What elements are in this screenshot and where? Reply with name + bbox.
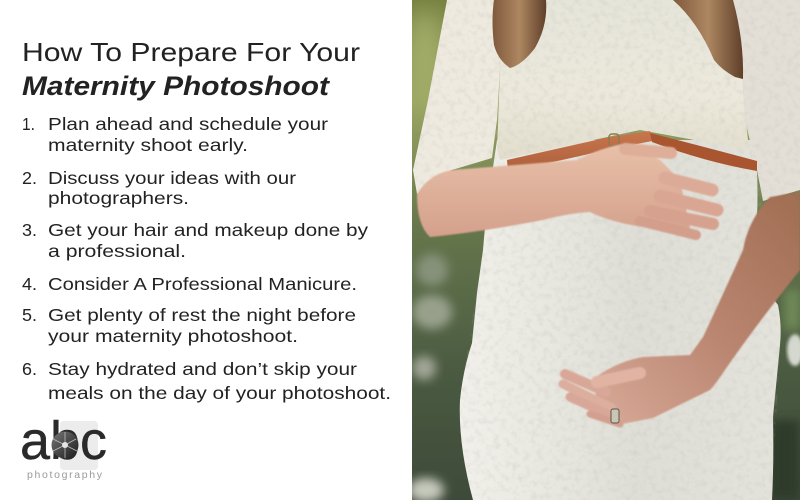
item 5: your maternity photoshoot. bbox=[48, 326, 298, 346]
item 6: Stay hydrated and don’t skip your bbox=[48, 359, 357, 379]
photo: pregnant woman in lace dress bbox=[407, 0, 800, 500]
logo: abc photography: abc bbox=[20, 411, 107, 471]
hair right bbox=[673, 0, 743, 79]
item 1: Plan ahead and schedule your bbox=[48, 114, 328, 134]
item 1: maternity shoot early. bbox=[48, 135, 248, 155]
checklist bbox=[22, 114, 391, 403]
item 5: Get plenty of rest the night before bbox=[48, 305, 356, 325]
fingers lower hand bbox=[563, 373, 640, 424]
fingers upper hand bbox=[625, 149, 717, 235]
item 3 bbox=[22, 220, 368, 261]
item 6: 6. bbox=[22, 359, 37, 379]
dress bodice bbox=[493, 0, 749, 160]
item 1 bbox=[22, 114, 328, 155]
item 5: 5. bbox=[22, 305, 37, 325]
upper arm and hand bbox=[417, 143, 717, 237]
item 2 bbox=[22, 168, 296, 208]
item 1: 1. bbox=[22, 114, 35, 134]
item 6 bbox=[22, 359, 391, 403]
left sleeve bbox=[413, 0, 500, 194]
photo background foliage bbox=[407, 0, 800, 500]
panel: text background bbox=[0, 0, 412, 500]
title: Maternity Photoshoot bbox=[22, 71, 330, 101]
dress lower body bbox=[460, 140, 781, 500]
lace texture bbox=[413, 0, 800, 500]
hair left bbox=[492, 0, 546, 68]
right forearm and lower hand bbox=[563, 192, 800, 425]
icon: ring bbox=[611, 409, 619, 423]
logo: abc photography: photography bbox=[27, 469, 103, 481]
item 4: Consider A Professional Manicure. bbox=[48, 274, 357, 294]
title: How To Prepare For Your bbox=[22, 37, 360, 67]
icon: camera aperture bbox=[52, 432, 78, 458]
item 3: 3. bbox=[22, 220, 37, 240]
title bbox=[22, 37, 360, 101]
belt bbox=[507, 131, 757, 172]
item 3: Get your hair and makeup done by bbox=[48, 220, 368, 240]
item 3: a professional. bbox=[48, 241, 186, 261]
item 2: 2. bbox=[22, 168, 37, 188]
item 5 bbox=[22, 305, 356, 346]
item 6: meals on the day of your photoshoot. bbox=[48, 383, 391, 403]
item 4: 4. bbox=[22, 274, 37, 294]
right sleeve bbox=[742, 0, 800, 201]
item 2: Discuss your ideas with our bbox=[48, 168, 296, 188]
item 2: photographers. bbox=[48, 188, 189, 208]
